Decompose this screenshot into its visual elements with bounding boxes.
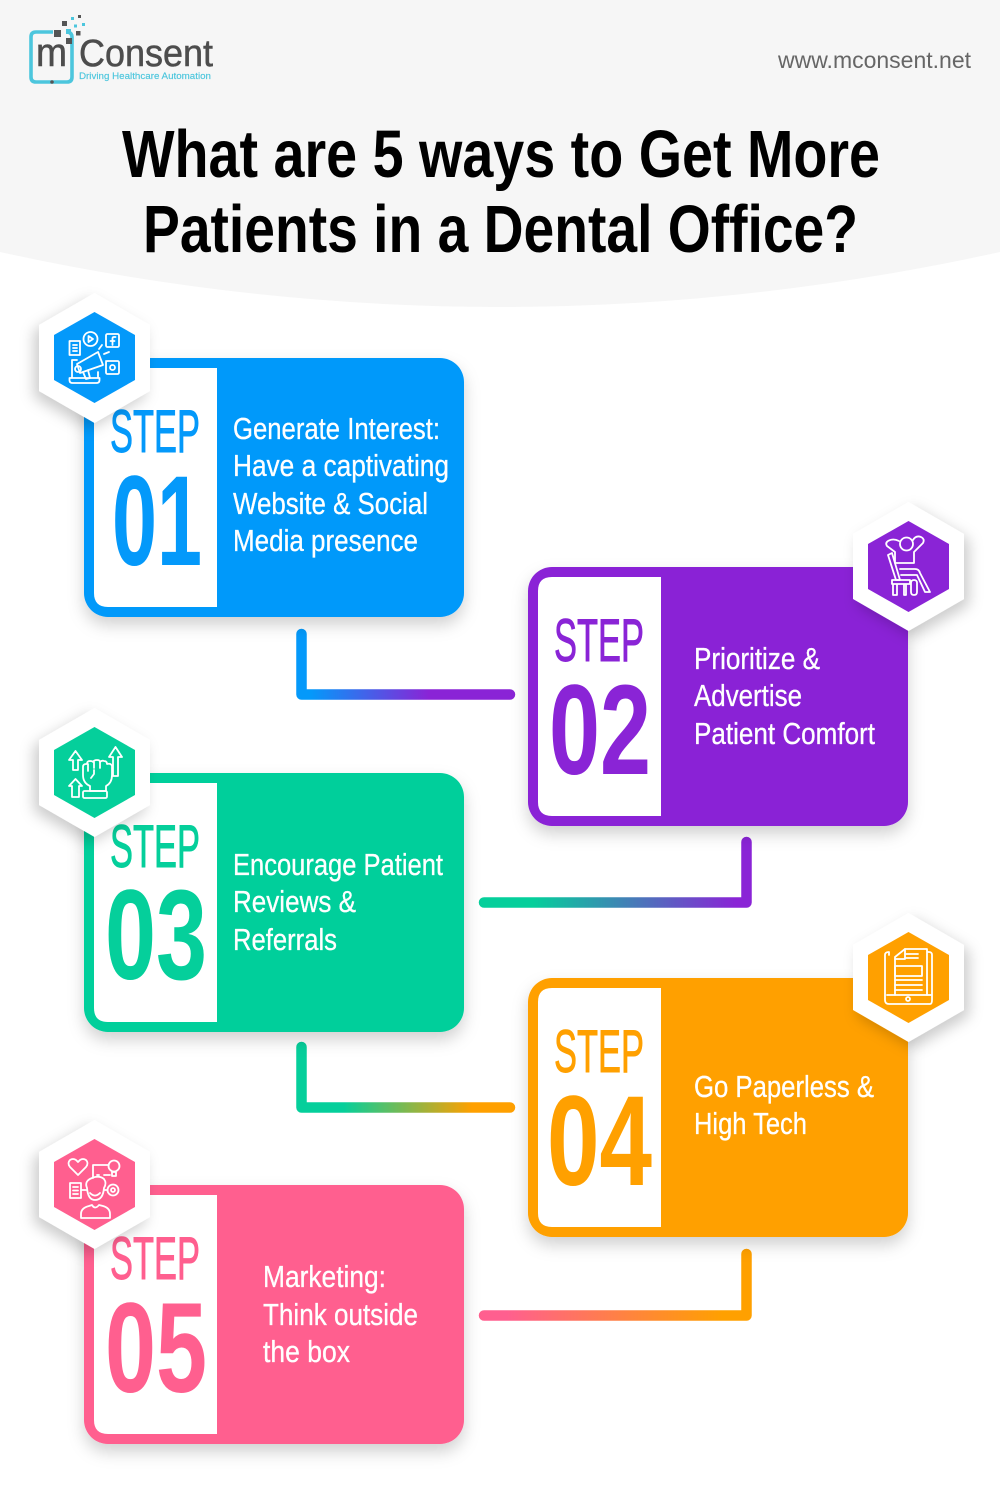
step 4 number: 04 bbox=[547, 1070, 652, 1213]
step 1 text bbox=[233, 412, 449, 558]
icon: paperless tablet document hexagon bbox=[853, 913, 964, 1042]
step 5 text: the box bbox=[263, 1335, 350, 1369]
icon: social media megaphone hexagon bbox=[39, 293, 150, 423]
step 3 text: Reviews & bbox=[233, 885, 356, 919]
icon: relaxed patient hexagon bbox=[853, 502, 964, 631]
step 4 text: High Tech bbox=[694, 1107, 807, 1141]
step 2 text: Prioritize & bbox=[694, 642, 820, 676]
logo: mConsent: m bbox=[36, 31, 67, 75]
panel: step 5 bbox=[84, 1185, 464, 1444]
step 4 label: STEP bbox=[554, 1018, 644, 1085]
step 1 text: Website & Social bbox=[233, 487, 428, 521]
header background bbox=[0, 0, 1000, 307]
logo: mConsent: Driving Healthcare Automation bbox=[79, 71, 211, 82]
panel: step 4 bbox=[528, 978, 908, 1237]
panel: step 3 bbox=[84, 773, 464, 1032]
step 5 number: 05 bbox=[105, 1277, 207, 1420]
panel: step 2 bbox=[528, 567, 908, 826]
step 2 text bbox=[694, 642, 875, 751]
step 2 text: Advertise bbox=[694, 679, 802, 713]
step 1 text: Have a captivating bbox=[233, 449, 449, 483]
step 1 number: 01 bbox=[112, 450, 202, 593]
step 5 text: Think outside bbox=[263, 1298, 418, 1332]
logo: mConsent bbox=[31, 15, 213, 84]
step 1 label: STEP bbox=[110, 398, 200, 465]
step 3 text: Referrals bbox=[233, 923, 337, 957]
step 5 text bbox=[263, 1260, 418, 1369]
connector: step 2 to step 3 bbox=[484, 842, 746, 902]
step 2 number: 02 bbox=[549, 659, 651, 802]
icon: marketing thinker hexagon bbox=[39, 1120, 150, 1249]
icon: raised fist with arrows hexagon bbox=[39, 708, 150, 837]
step 2 label: STEP bbox=[554, 607, 644, 674]
step 1 text: Generate Interest: bbox=[233, 412, 440, 446]
step 4 text: Go Paperless & bbox=[694, 1070, 874, 1104]
step 3 text: Encourage Patient bbox=[233, 848, 443, 882]
step 4 text bbox=[694, 1070, 874, 1141]
step 3 label: STEP bbox=[110, 813, 200, 880]
panel: step 1 bbox=[84, 358, 464, 617]
step 3 number: 03 bbox=[105, 864, 207, 1007]
step 5 label: STEP bbox=[110, 1225, 200, 1292]
connector: step 4 to step 5 bbox=[484, 1254, 746, 1316]
step 1 text: Media presence bbox=[233, 524, 418, 558]
connector: step 1 to step 2 bbox=[302, 634, 510, 694]
step 3 text bbox=[233, 848, 443, 957]
logo: mConsent: Consent bbox=[79, 33, 213, 75]
step 2 text: Patient Comfort bbox=[694, 717, 875, 751]
website url: www.mconsent.net bbox=[777, 47, 972, 73]
title: Patients in a Dental Office? bbox=[143, 192, 858, 267]
step 5 text: Marketing: bbox=[263, 1260, 386, 1294]
title bbox=[122, 117, 880, 267]
connector: step 3 to step 4 bbox=[302, 1047, 510, 1108]
